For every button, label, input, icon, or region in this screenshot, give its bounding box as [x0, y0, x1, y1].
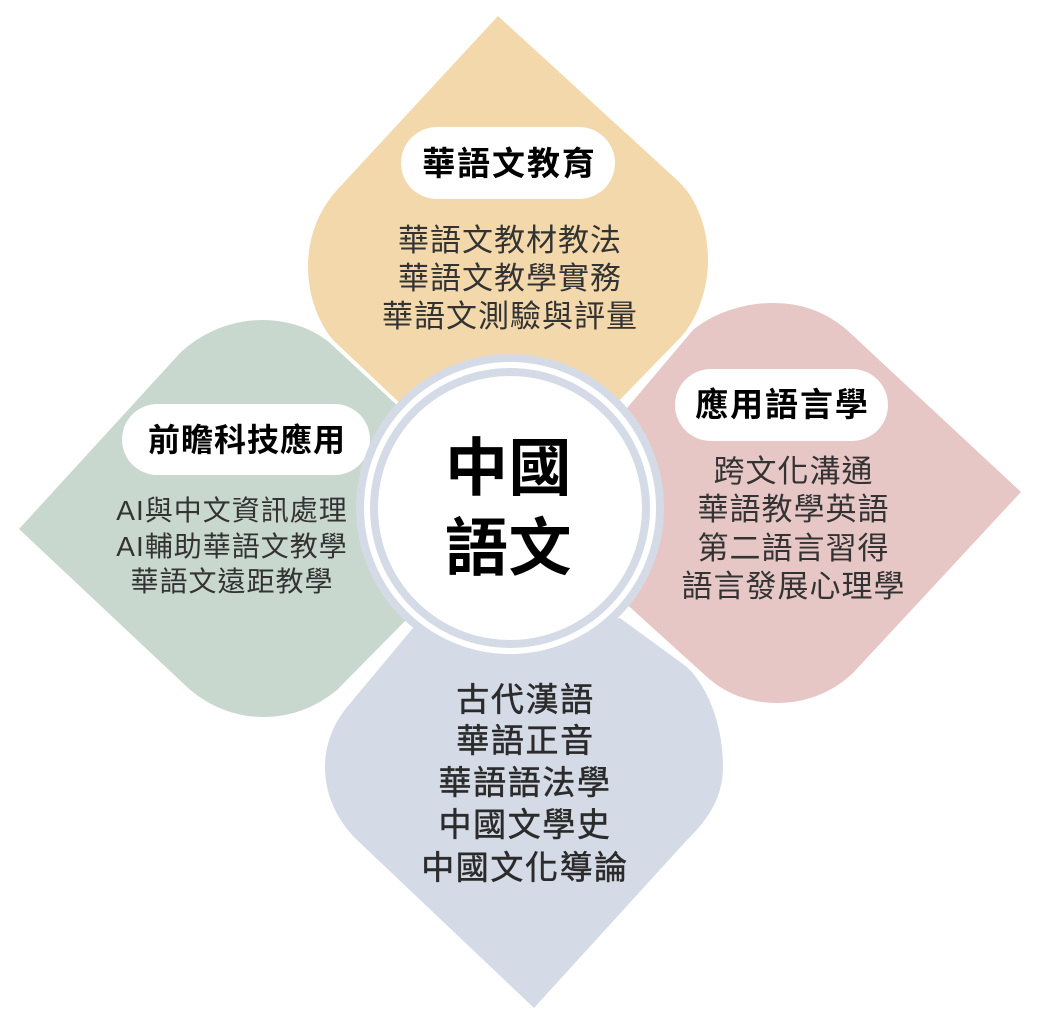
text block: technology courses [116, 495, 348, 597]
heading: 應用語言學: 應用語言學 [695, 386, 870, 423]
outer ring [360, 358, 660, 658]
petal: right [622, 303, 1021, 703]
panel: 華語文教育 [308, 16, 708, 408]
text block: core course list [421, 681, 629, 886]
text block: core course list: 中國文化導論 [421, 849, 629, 886]
text block: technology courses: AI與中文資訊處理 [116, 495, 348, 526]
pill: 前瞻科技應用 [122, 404, 370, 475]
text block: education courses: 華語文測驗與評量 [382, 299, 638, 334]
inner ring [374, 372, 646, 644]
text block: applied linguistics courses [682, 454, 906, 604]
text block: applied linguistics courses: 跨文化溝通 [714, 454, 874, 489]
panel: 應用語言學 [622, 303, 1021, 703]
text block: core course list: 華語語法學 [438, 764, 612, 801]
text block: education courses [382, 223, 638, 334]
text block: technology courses: 華語文遠距教學 [130, 566, 334, 597]
text block: core course list: 古代漢語 [456, 681, 595, 718]
heading: 華語文教育: 華語文教育 [422, 145, 597, 182]
text block: education courses: 華語文教學實務 [398, 261, 622, 296]
text block: core course list: 華語正音 [456, 722, 595, 759]
panel: 前瞻科技應用 [19, 320, 408, 717]
pill: 應用語言學 [675, 369, 888, 441]
petal: bottom [325, 618, 723, 1008]
center title: 中國 [445, 434, 572, 504]
text block: applied linguistics courses: 華語教學英語 [698, 492, 890, 527]
text block: core course list: 中國文學史 [438, 806, 612, 843]
panel: core courses [325, 618, 723, 1008]
petal: left [19, 320, 408, 717]
petal: top [308, 16, 708, 408]
center title [445, 434, 572, 584]
text block: applied linguistics courses: 第二語言習得 [698, 531, 890, 566]
center title: 語文 [445, 514, 572, 584]
text block: education courses: 華語文教材教法 [398, 223, 622, 258]
heading: 前瞻科技應用: 前瞻科技應用 [148, 422, 346, 458]
center badge: 中國語文 [360, 358, 660, 658]
text block: technology courses: AI輔助華語文教學 [116, 531, 348, 562]
text block: applied linguistics courses: 語言發展心理學 [682, 569, 906, 604]
pill: 華語文教育 [401, 127, 615, 199]
